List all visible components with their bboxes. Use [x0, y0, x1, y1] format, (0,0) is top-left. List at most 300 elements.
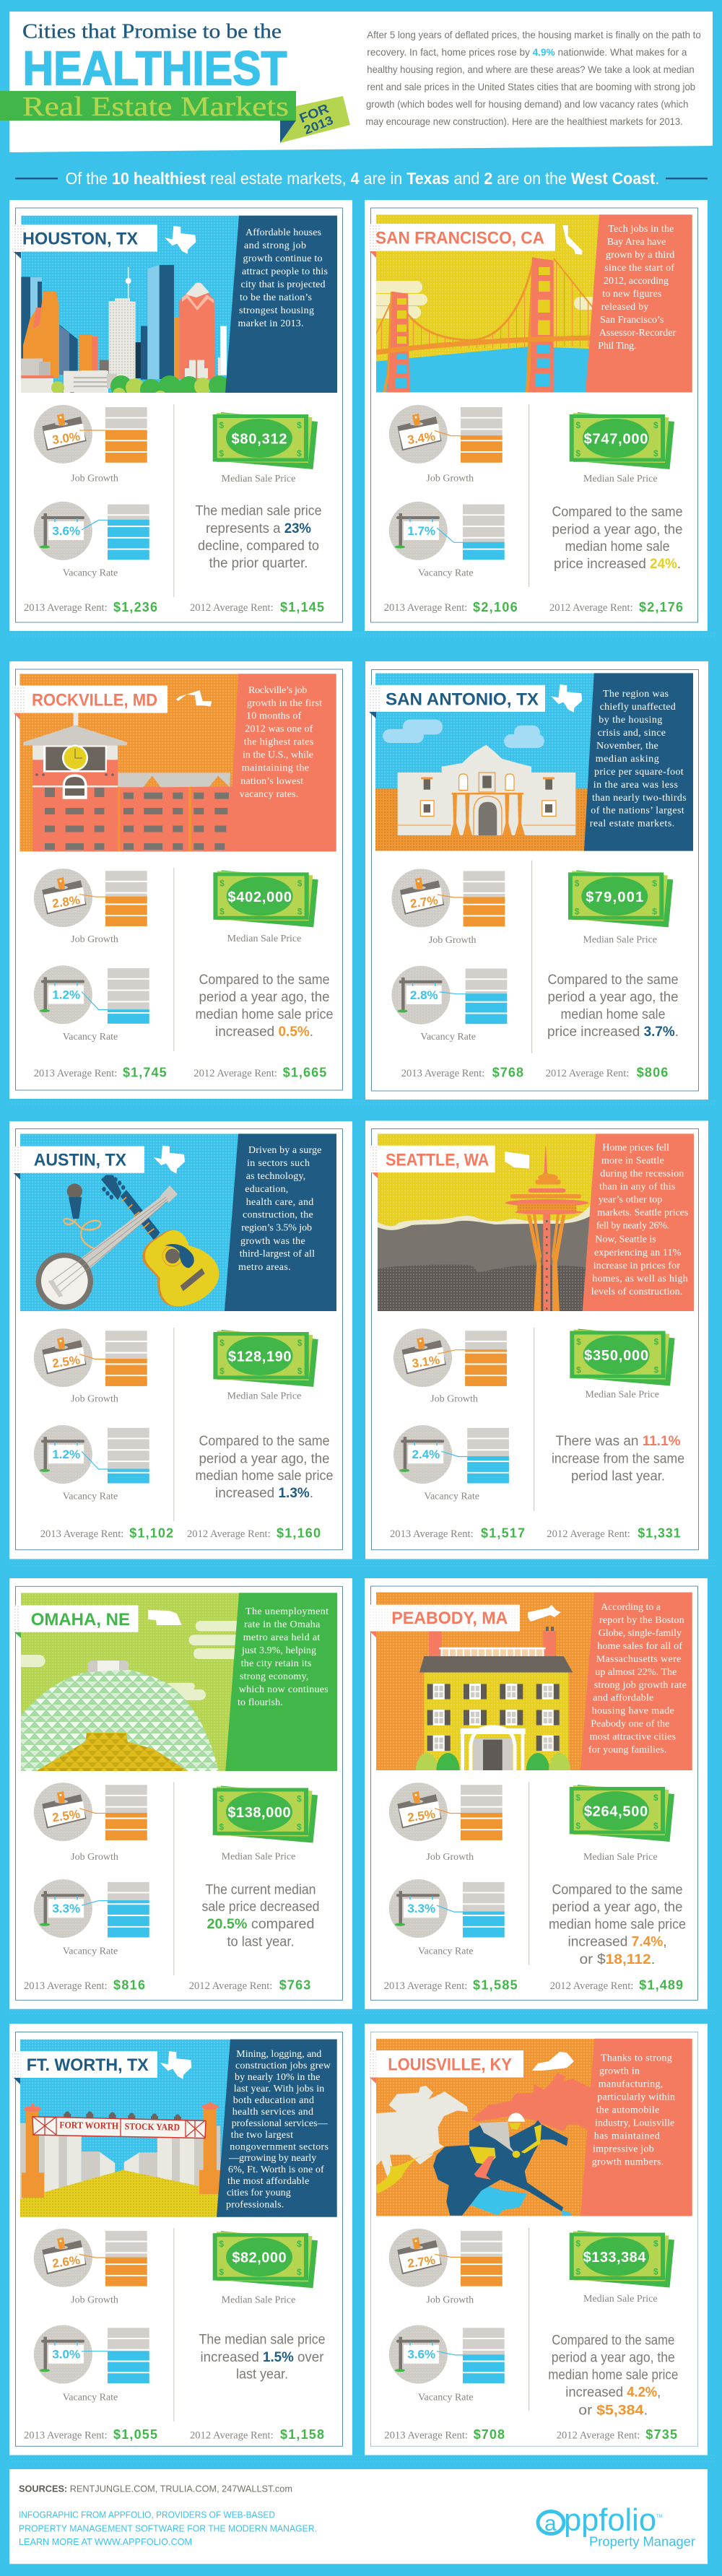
text panel: Ft. Worth: last year. With jobs in — [234, 2084, 324, 2094]
job growth metric: Ft. Worth: 2.6% — [51, 2253, 81, 2271]
title banner: Austin — [12, 1146, 144, 1180]
average rents: Seattle: 2013 Average Rent: — [390, 1528, 474, 1540]
price note: San Antonio: price increased 3.7%. — [547, 1024, 679, 1040]
title banner: Rockville — [12, 686, 168, 720]
icon: Maryland map — [176, 690, 212, 707]
average rents: San Antonio: 2013 Average Rent: — [401, 1068, 484, 1079]
text panel: San Antonio: of the nations’ largest — [591, 806, 684, 817]
job growth metric: Seattle: 3.1% — [411, 1353, 440, 1370]
title banner: Peabody: PEABODY, MA — [391, 1609, 508, 1628]
text panel: Omaha: strong economy, — [240, 1671, 308, 1682]
price note: Louisville: median home sale price — [548, 2367, 678, 2383]
text panel: San Francisco: 2012, according — [604, 276, 669, 287]
icon: Kentucky map — [532, 2052, 574, 2071]
price note: Austin: median home sale price — [195, 1468, 334, 1484]
icon: California map — [562, 225, 583, 255]
price note: Peabody: median home sale price — [549, 1918, 686, 1933]
title banner: San Francisco — [368, 224, 555, 258]
icon: Massachusetts map — [528, 1605, 561, 1622]
footer panel — [9, 2469, 708, 2564]
price note: Ft. Worth: The median sale price — [199, 2333, 325, 2348]
vacancy rate metric: Peabody: 3.3% — [407, 1902, 435, 1915]
text panel: San Francisco: San Francisco’s — [600, 315, 664, 326]
vacancy rate metric: Ft. Worth: Vacancy Rate — [63, 2392, 118, 2403]
median sale price bill: Omaha: $$ — [219, 1793, 302, 1803]
price note: Seattle: increase from the same — [552, 1451, 684, 1466]
vacancy rate metric: Ft. Worth — [34, 2325, 149, 2403]
text panel: San Antonio — [584, 673, 693, 851]
average rents: Seattle — [390, 1526, 681, 1541]
text panel: Omaha: which now continues — [239, 1684, 329, 1695]
median sale price bill: San Francisco: $$ — [575, 420, 658, 430]
vacancy rate metric: San Antonio: Vacancy Rate — [420, 1032, 476, 1043]
text panel: Louisville: has maintained — [594, 2131, 660, 2141]
text panel: Houston: market in 2013. — [238, 318, 303, 329]
title banner: Louisville: LOUISVILLE, KY — [388, 2055, 512, 2075]
text panel: Peabody: home sales for all of — [597, 1641, 682, 1652]
text panel: Louisville: growth in — [599, 2066, 640, 2076]
median sale price bill: Rockville: $402,000 — [227, 889, 292, 905]
job growth metric: San Antonio — [391, 869, 505, 946]
average rents: Omaha: 2013 Average Rent: — [24, 1980, 108, 1992]
average rents: San Francisco: 2013 Average Rent: — [384, 602, 467, 614]
title: lead-in line: Cities that Promise to be the — [22, 21, 282, 43]
median sale price bill: Omaha: $138,000 — [227, 1805, 291, 1821]
text panel: Seattle: homes, as well as high — [592, 1274, 688, 1284]
text panel: Peabody: Peabody one of the — [591, 1719, 669, 1730]
divider — [173, 404, 175, 597]
vacancy rate metric: Houston: 3.6% — [52, 524, 80, 538]
text panel: Ft. Worth: Mining, logging, and — [236, 2049, 321, 2060]
average rents: Omaha: 2012 Average Rent: — [189, 1980, 272, 1992]
median sale price bill: Omaha: $$ — [219, 1822, 302, 1832]
price note: Omaha: sale price decreased — [202, 1900, 319, 1915]
text panel: San Antonio: chiefly unaffected — [600, 702, 676, 713]
average rents: Louisville: $735 — [645, 2427, 677, 2442]
text panel: Louisville: Thanks to strong — [601, 2053, 672, 2063]
vacancy rate metric: San Francisco — [389, 502, 505, 578]
illustration: banjo, guitar and microphone — [20, 1133, 238, 1311]
intro paragraph: recovery. In fact, home prices rose by 4.9% nationwide. What makes for a — [367, 46, 687, 58]
average rents: Peabody: 2013 Average Rent: — [384, 1980, 467, 1992]
price note: Louisville: period a year ago, the — [552, 2351, 675, 2366]
text panel: Ft. Worth: both education and — [233, 2095, 314, 2106]
price note: Austin: period a year ago, the — [199, 1451, 329, 1466]
text panel: Rockville: maintaining the — [242, 762, 309, 774]
price note: San Francisco: period a year ago, the — [552, 522, 683, 537]
text panel: Ft. Worth: construction jobs grew — [235, 2061, 331, 2071]
title banner: Seattle — [370, 1146, 495, 1178]
title banner: San Antonio — [367, 685, 545, 718]
price note: Ft. Worth: increased 1.5% over — [201, 2350, 324, 2365]
average rents: Austin: 2012 Average Rent: — [187, 1528, 271, 1540]
average rents: Ft. Worth: $1,055 — [113, 2427, 157, 2442]
vacancy rate metric: San Francisco: 1.7% — [407, 524, 435, 538]
vacancy rate metric: Louisville — [389, 2325, 505, 2403]
price note: Rockville: Compared to the same — [199, 972, 329, 988]
text panel: Austin: Driven by a surge — [248, 1145, 321, 1156]
price note: San Francisco: Compared to the same — [552, 505, 683, 520]
text panel: Houston: growth continue to — [243, 253, 322, 264]
credit text: PROPERTY MANAGEMENT SOFTWARE FOR THE MODERN MANAGER. — [19, 2523, 317, 2534]
title banner: Ft. Worth: FT. WORTH, TX — [27, 2055, 149, 2075]
text panel: Ft. Worth: professional services— — [232, 2118, 329, 2129]
average rents: Louisville: $708 — [474, 2427, 505, 2442]
text panel: Rockville: vacancy rates. — [240, 789, 298, 800]
median sale price bill: Austin: $128,190 — [228, 1349, 292, 1365]
text panel: San Francisco: Phil Ting. — [598, 341, 636, 352]
text panel: Omaha: the city retain its — [241, 1658, 311, 1669]
vacancy rate metric: Rockville: 1.2% — [52, 988, 80, 1002]
logo: AppFolio Property Manager: TM — [656, 2515, 663, 2519]
average rents: Houston: $1,236 — [113, 600, 157, 614]
median sale price bill: Louisville: $$ — [575, 2238, 658, 2248]
text panel: Austin: growth was the — [240, 1236, 305, 1247]
text panel: San Antonio: November, the — [596, 741, 658, 752]
text panel: Louisville — [580, 2039, 692, 2216]
logo: AppFolio Property Manager: ppfolio — [564, 2502, 656, 2538]
job growth metric: Louisville — [389, 2229, 503, 2305]
price note: Peabody: period a year ago, the — [552, 1900, 683, 1915]
median sale price bill: Omaha — [213, 1786, 318, 1863]
average rents: Rockville — [34, 1066, 326, 1080]
text panel: Omaha — [225, 1593, 337, 1771]
card: Louisville, KY — [365, 2024, 708, 2455]
illustration: Omaha geodesic dome — [14, 1593, 337, 1771]
text panel: Houston: and strong job — [244, 240, 306, 251]
text panel: Austin: region’s 3.5% job — [241, 1223, 312, 1234]
icon: Texas map — [165, 226, 196, 254]
title: HEALTHIEST: HEALTHIEST — [23, 42, 287, 95]
median sale price bill: Houston: Median Sale Price — [222, 474, 295, 484]
job growth metric: Rockville: Job Growth — [71, 934, 118, 945]
job growth metric: Houston — [34, 405, 147, 484]
job growth metric: Peabody: 2.5% — [406, 1807, 436, 1824]
average rents: San Francisco: 2012 Average Rent: — [549, 602, 633, 614]
median sale price bill: San Antonio — [568, 870, 673, 946]
text panel: Austin: health care, and — [246, 1197, 313, 1208]
text panel: Seattle: Home prices fell — [602, 1143, 669, 1154]
average rents: Austin — [40, 1526, 321, 1541]
price note: Seattle: There was an 11.1% — [556, 1434, 681, 1449]
average rents: Austin: 2013 Average Rent: — [40, 1528, 123, 1540]
median sale price bill: Seattle: Median Sale Price — [585, 1389, 659, 1400]
price note: Omaha: 20.5% compared — [206, 1917, 315, 1932]
median sale price bill: Austin: $$ — [219, 1366, 303, 1376]
average rents: Austin: $1,102 — [129, 1526, 173, 1541]
text panel: Peabody — [580, 1593, 692, 1770]
text panel: San Francisco: since the start of — [604, 263, 674, 274]
job growth metric: Austin — [34, 1328, 147, 1404]
median sale price bill: Seattle: $$ — [576, 1337, 659, 1347]
illustration: Peabody colonial house — [376, 1593, 692, 1788]
divider — [173, 2228, 175, 2421]
job growth metric: San Antonio: 2.7% — [409, 893, 439, 911]
card: Seattle, WA — [365, 1121, 708, 1559]
price note: Louisville: or $5,384 . — [578, 2403, 648, 2418]
text panel: Peabody: strong job growth rate — [594, 1680, 687, 1691]
job growth metric: Seattle: Job Growth — [430, 1393, 478, 1404]
median sale price bill: Louisville: Median Sale Price — [583, 2294, 658, 2305]
illustration: Space Needle — [378, 1133, 694, 1311]
text panel: Louisville: growth numbers. — [592, 2157, 664, 2167]
median sale price bill: Ft. Worth: $$ — [219, 2267, 302, 2277]
text panel: Omaha: to flourish. — [238, 1697, 283, 1708]
median sale price bill: Louisville: $133,384 — [583, 2250, 646, 2266]
vacancy rate metric: Peabody: Vacancy Rate — [418, 1946, 474, 1957]
median sale price bill: Seattle — [570, 1328, 675, 1400]
illustration: the Alamo — [375, 673, 594, 851]
average rents: Rockville: $1,745 — [123, 1066, 167, 1080]
text panel: Peabody: Massachusetts were — [596, 1654, 681, 1665]
job growth metric: Seattle — [393, 1328, 507, 1404]
text panel: San Antonio: The region was — [603, 689, 669, 700]
job growth metric: San Francisco: 3.4% — [406, 430, 436, 447]
average rents: Omaha — [24, 1977, 310, 1992]
vacancy rate metric: San Antonio — [391, 966, 507, 1043]
text panel: Rockville — [229, 674, 336, 851]
card: Rockville, MD — [9, 661, 352, 1099]
title banner: Houston: HOUSTON, TX — [22, 230, 138, 249]
summary headline: Of the 10 healthiest real estate markets, 4 are in Texas and 2 are on the West Coast. — [66, 169, 659, 188]
job growth metric: Omaha — [34, 1783, 147, 1863]
vacancy rate metric: Omaha: Vacancy Rate — [63, 1946, 118, 1957]
median sale price bill: Seattle: $$ — [576, 1365, 659, 1375]
price note: Omaha: to last year. — [227, 1934, 295, 1949]
average rents: Rockville: 2013 Average Rent: — [34, 1068, 117, 1079]
text panel: San Francisco: Bay Area have — [607, 237, 666, 248]
text panel: Houston: to be the nation’s — [240, 292, 312, 303]
job growth metric: Louisville: 2.7% — [406, 2253, 436, 2271]
job growth metric: San Antonio: Job Growth — [429, 935, 477, 946]
median sale price bill: Ft. Worth: $82,000 — [232, 2250, 287, 2266]
title banner: Omaha — [13, 1606, 139, 1638]
title banner: Peabody — [368, 1605, 520, 1637]
text panel: Peabody: up almost 22%. The — [595, 1667, 677, 1678]
icon: Texas map — [551, 684, 582, 713]
median sale price bill: San Francisco: $$ — [575, 448, 658, 458]
text panel: Ft. Worth: health services and — [232, 2107, 313, 2118]
divider — [173, 1782, 175, 1975]
text panel: Rockville: in the U.S., while — [243, 750, 313, 761]
illustration: Golden Gate Bridge — [372, 214, 692, 393]
title banner: San Francisco: SAN FRANCISCO, CA — [375, 228, 544, 248]
job growth metric: Houston: Job Growth — [71, 474, 118, 484]
credit text — [19, 2509, 317, 2547]
median sale price bill: Houston: $$ — [219, 448, 302, 458]
job growth metric: San Francisco — [389, 405, 503, 484]
vacancy rate metric: Austin: Vacancy Rate — [63, 1492, 118, 1502]
median sale price bill: San Francisco — [570, 412, 674, 484]
average rents: Louisville: 2012 Average Rent: — [557, 2430, 640, 2442]
median sale price bill: Louisville: $$ — [575, 2267, 658, 2277]
sources: SOURCES: RENTJUNGLE.COM, TRULIA.COM, 247WALLST.com — [19, 2484, 292, 2494]
price note: Rockville: period a year ago, the — [199, 990, 329, 1005]
text panel: San Francisco: Assessor-Recorder — [599, 328, 677, 339]
text panel: Peabody: According to a — [601, 1602, 661, 1613]
text panel: San Francisco: Tech jobs in the — [608, 224, 674, 235]
median sale price bill: San Antonio: $$ — [575, 878, 657, 888]
text panel: Houston: city that is projected — [241, 279, 325, 290]
text panel: Austin: third-largest of all — [240, 1249, 315, 1260]
card: Ft. Worth, TX — [9, 2024, 352, 2455]
text panel: Peabody: for young families. — [588, 1745, 666, 1756]
text panel: Austin: education, — [245, 1184, 288, 1195]
price note: San Antonio — [547, 972, 679, 1040]
card: San Antonio, TX — [365, 661, 708, 1100]
text panel: Seattle: fell by nearly 26%. — [596, 1220, 669, 1231]
price note: Seattle — [552, 1434, 684, 1484]
text panel: Seattle: year’s other top — [599, 1194, 662, 1206]
text panel: Peabody: most attractive cities — [590, 1732, 676, 1743]
text panel: Rockville: 10 months of — [246, 711, 302, 722]
average rents: Ft. Worth: 2013 Average Rent: — [24, 2430, 108, 2442]
median sale price bill: Rockville — [213, 870, 318, 944]
job growth metric: Rockville — [34, 869, 147, 945]
median sale price bill: Houston: $80,312 — [231, 432, 287, 448]
vacancy rate metric: Rockville — [34, 965, 149, 1043]
icon: Washington map — [505, 1152, 529, 1169]
text panel: Ft. Worth: 6%, Ft. Worth is one of — [228, 2164, 324, 2175]
text panel: San Antonio: median asking — [596, 754, 659, 765]
average rents: Peabody: $1,489 — [639, 1977, 683, 1992]
average rents: San Antonio — [401, 1066, 668, 1080]
average rents: San Francisco — [384, 600, 683, 614]
average rents: Houston: $1,145 — [280, 600, 324, 614]
vacancy rate metric: Austin: 1.2% — [52, 1448, 80, 1461]
price note: Peabody: Compared to the same — [552, 1883, 683, 1897]
text panel: Seattle — [583, 1133, 694, 1311]
average rents: Peabody: $1,585 — [473, 1977, 518, 1992]
average rents: Seattle: 2012 Average Rent: — [547, 1528, 630, 1540]
price note: San Francisco — [552, 505, 683, 572]
text panel: Rockville: nation’s lowest — [240, 776, 303, 787]
price note: Rockville — [195, 972, 334, 1040]
median sale price bill: San Antonio: $$ — [575, 906, 657, 916]
price note: Louisville: Compared to the same — [552, 2333, 674, 2348]
job growth metric: Peabody — [389, 1783, 503, 1863]
job growth metric: Ft. Worth: Job Growth — [71, 2294, 118, 2305]
text panel: Ft. Worth — [217, 2040, 337, 2217]
logo: AppFolio Property Manager: Property Manager — [589, 2535, 695, 2549]
median sale price bill: Austin: Median Sale Price — [227, 1391, 301, 1401]
intro paragraph — [365, 29, 701, 127]
illustration: Louisville racehorses — [376, 2039, 692, 2216]
average rents: Rockville: $1,665 — [283, 1066, 326, 1080]
text panel: San Antonio: crisis and, since — [598, 728, 666, 739]
ribbon: for 2013: FOR — [297, 101, 331, 126]
average rents: Ft. Worth — [24, 2427, 324, 2442]
average rents: Ft. Worth: 2012 Average Rent: — [190, 2430, 274, 2442]
vacancy rate metric: Seattle: Vacancy Rate — [424, 1492, 479, 1502]
title banner: Houston — [12, 225, 157, 258]
average rents: Louisville: 2013 Average Rent: — [384, 2430, 468, 2442]
text panel: Omaha: metro area held at — [243, 1632, 320, 1643]
text panel: San Antonio: in the area was less — [593, 780, 678, 791]
ribbon: for 2013: 2013 — [302, 113, 335, 137]
text panel: Peabody: housing have made — [592, 1706, 674, 1717]
job growth metric: Peabody: Job Growth — [426, 1852, 474, 1863]
price note: Houston: The median sale price — [195, 504, 322, 519]
price note: San Antonio: period a year ago, the — [547, 990, 679, 1005]
text panel: Seattle: more in Seattle — [601, 1156, 664, 1167]
text panel: Houston — [225, 216, 337, 393]
price note: Peabody — [549, 1883, 686, 1967]
price note: Austin: increased 1.3%. — [215, 1486, 313, 1501]
divider — [531, 861, 532, 1053]
text panel: San Francisco: grown by a third — [606, 250, 674, 261]
average rents: Seattle: $1,517 — [481, 1526, 525, 1541]
average rents: San Antonio: $768 — [492, 1066, 523, 1080]
text panel: Austin: metro areas. — [238, 1262, 291, 1273]
text panel: Austin: construction, the — [243, 1210, 313, 1221]
text panel: Rockville: 2012 was one of — [245, 724, 313, 735]
card: Austin, TX — [9, 1121, 352, 1559]
price note: Peabody: increased 7.4%, — [567, 1934, 667, 1949]
title banner: Seattle: SEATTLE, WA — [386, 1151, 489, 1170]
divider — [173, 868, 175, 1051]
median sale price bill: Peabody — [570, 1785, 674, 1863]
intro paragraph: growth (which bodes well for housing demand) and low vacancy rates (which — [366, 98, 688, 110]
median sale price bill: Rockville: $$ — [219, 878, 303, 888]
intro paragraph: healthy housing region, and where are these areas? We take a look at median — [367, 64, 695, 75]
median sale price bill: San Antonio: Median Sale Price — [583, 934, 657, 946]
price note: Houston: decline, compared to — [198, 539, 319, 554]
text panel: Louisville: the automobile — [596, 2105, 659, 2115]
price note: Omaha — [202, 1883, 319, 1949]
price note: San Francisco: median home sale — [565, 539, 670, 554]
vacancy rate metric: Seattle: 2.4% — [412, 1448, 440, 1461]
text panel: Ft. Worth: by nearly 10% in the — [235, 2072, 320, 2083]
title banner: Rockville: ROCKVILLE, MD — [32, 690, 157, 710]
text panel: Rockville: growth in the first — [247, 698, 322, 709]
median sale price bill: Peabody: $264,500 — [584, 1803, 648, 1819]
job growth metric: Louisville: Job Growth — [426, 2294, 474, 2305]
ribbon: for 2013 — [280, 96, 350, 143]
text panel: Seattle: than in any of this — [599, 1182, 675, 1193]
text panel: Rockville: the highest rates — [244, 737, 313, 748]
text panel: San Francisco: released by — [601, 302, 648, 313]
card: Peabody, MA — [365, 1578, 708, 2009]
vacancy rate metric: Louisville: 3.6% — [407, 2348, 435, 2362]
title banner: Real Estate Markets: Real Estate Markets — [22, 92, 289, 122]
average rents: Seattle: $1,331 — [638, 1526, 681, 1541]
credit text: INFOGRAPHIC FROM APPFOLIO, PROVIDERS OF WEB-BASED — [19, 2509, 275, 2520]
median sale price bill: Houston: $$ — [219, 420, 302, 430]
card: Omaha, NE — [9, 1578, 352, 2009]
median sale price bill: Austin — [213, 1330, 318, 1401]
text panel: San Antonio: price per square-foot — [594, 767, 684, 778]
job growth metric: Ft. Worth — [34, 2229, 147, 2305]
text panel: Louisville: particularly within — [597, 2092, 675, 2102]
median sale price bill: Peabody: Median Sale Price — [583, 1852, 658, 1863]
card: Houston, TX — [9, 200, 352, 631]
text panel: Austin: as technology, — [246, 1171, 305, 1182]
text panel: Houston: attract people to this — [242, 266, 328, 277]
text panel: San Francisco — [586, 214, 692, 393]
price note: Ft. Worth — [199, 2333, 325, 2383]
icon: Texas map — [160, 2051, 191, 2079]
text panel: Ft. Worth: professionals. — [226, 2199, 284, 2210]
text panel: Peabody: report by the Boston — [599, 1615, 684, 1626]
median sale price bill: Louisville — [570, 2231, 674, 2305]
vacancy rate metric: Louisville: Vacancy Rate — [418, 2392, 474, 2403]
job growth metric: Omaha: 2.5% — [51, 1807, 81, 1824]
average rents: Houston — [24, 600, 324, 614]
title banner: Austin: AUSTIN, TX — [34, 1151, 126, 1170]
text panel: Seattle: markets. Seattle prices — [597, 1207, 688, 1219]
median sale price bill: Seattle: $350,000 — [584, 1348, 648, 1364]
